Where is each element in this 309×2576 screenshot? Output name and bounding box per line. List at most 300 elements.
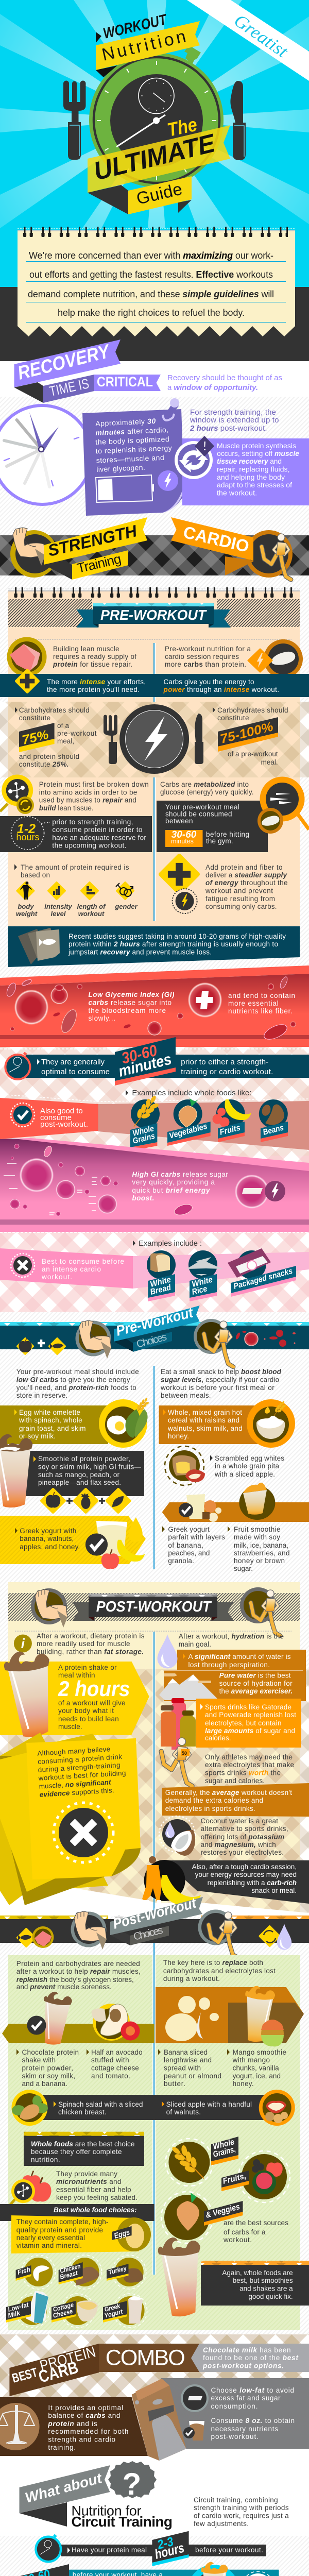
text columns: post-workout food options: lengthwise and xyxy=(164,2056,212,2064)
icon: gender: gender xyxy=(114,903,138,910)
recovery heading: CRITICAL xyxy=(97,374,153,389)
label: fish: Fish xyxy=(16,2266,31,2276)
band: average workout: electrolytes in sports drinks. xyxy=(165,1805,255,1812)
option: egg white omelette: grain toast, and skim xyxy=(19,1425,85,1432)
recovery heading xyxy=(14,340,161,403)
title ribbon: the ultimate guide: ULTIMATE xyxy=(91,128,218,186)
food circles: protein choices row one xyxy=(16,2255,146,2289)
label: chicken breast xyxy=(59,2262,83,2284)
box: 30-60 minutes before gym: 30-60 xyxy=(171,829,197,840)
heading: what about circuit training: Circuit Training xyxy=(71,2514,173,2530)
band: carb-rich snack after cardio: replenishing with a carb-rich xyxy=(208,1879,297,1887)
food: fruits circle: Fruits, xyxy=(222,2172,247,2186)
box: eggs: Eggs xyxy=(113,2228,131,2241)
text: circuit training intro: Circuit training, combining xyxy=(194,2496,278,2504)
box: whole foods: because they offer complete xyxy=(31,2148,122,2156)
block: protein broken down: Protein must first be broken down xyxy=(39,781,149,788)
strength text: 2 hours post-workout. xyxy=(190,424,267,433)
band: carb-rich snack after cardio xyxy=(142,1856,309,1906)
option: smoothie: such as mango, peach, or xyxy=(38,1471,119,1479)
band: protein meal 2-3 hours: 2-3 xyxy=(156,2534,175,2552)
text columns: post-workout food options: protein powder, xyxy=(22,2064,73,2072)
box: sports drinks: large amounts of sugar and xyxy=(205,1727,295,1735)
banner: best before intense cardio xyxy=(0,1248,133,1289)
box: whole foods xyxy=(24,2132,144,2166)
panel: best protein carb combo xyxy=(0,2334,309,2414)
title ribbon: the ultimate guide: The xyxy=(165,114,199,141)
food: whole grains: Whole xyxy=(132,1124,155,1138)
text: high GI carbs: very quickly, providing a xyxy=(132,1178,215,1186)
intro text: out efforts and getting the fastest results. Effective workouts xyxy=(29,269,273,280)
text: protein and carbs needed: replenish the body's glycogen stores, xyxy=(16,1976,134,1984)
panel: high GI examples xyxy=(0,1232,309,1312)
recovery intro text xyxy=(167,374,282,392)
icon: mini blood cells xyxy=(235,1330,296,1347)
block: add protein and fiber: deliver a steadier supply xyxy=(205,871,287,879)
panel: low-fat and 8 oz: excess fat and sugar xyxy=(211,2394,281,2402)
option: egg white omelette: Egg white omelette xyxy=(19,1409,80,1416)
icon: magenta blood cells xyxy=(4,1144,285,1217)
panel: optimal balance: strength and cardio xyxy=(48,2436,115,2444)
text: low GI carbs: slowly... xyxy=(89,1014,115,1022)
heading: what about circuit training: ? xyxy=(123,2467,141,2501)
box: whole foods: nutrition. xyxy=(31,2156,60,2164)
box: smoothies and shakes: Again, whole foods are xyxy=(222,2269,293,2277)
food: beans xyxy=(259,1099,288,1142)
panel: low-fat and 8 oz xyxy=(132,2378,309,2461)
option: hot cereal: honey. xyxy=(168,1432,189,1440)
option: scrambled egg whites: with a sliced apple. xyxy=(214,1470,275,1478)
text: high GI carbs: boost. xyxy=(132,1194,154,1202)
icon: runner with bib 50: 50 xyxy=(182,1751,187,1756)
icon: body weight: weight xyxy=(16,910,38,918)
panel: low GI bloodstream xyxy=(0,965,309,1047)
recovery intro text: Recovery should be thought of as xyxy=(167,374,282,382)
heading: cardio: CARDIO xyxy=(181,522,251,556)
text: protein and carbs needed xyxy=(16,1960,141,1991)
band: carb-rich snack after cardio: snack or meal. xyxy=(251,1887,297,1894)
intro text xyxy=(26,250,286,323)
block: add protein and fiber: Add protein and fiber to xyxy=(205,863,282,871)
panel: low-fat and 8 oz: consumption. xyxy=(211,2402,258,2410)
box: 1-2 hours prior: consume protein in order to xyxy=(52,826,142,834)
box: 1-2 hours prior: the upcoming workout. xyxy=(52,842,126,849)
band: intensity xyxy=(0,670,309,697)
callout: protein shake within 2 hours: of a workout will give xyxy=(58,1699,126,1707)
text: parfait and fruit smoothie: granola. xyxy=(168,1557,194,1565)
heading: what about circuit training xyxy=(20,2461,173,2530)
heading ribbon: post-workout: POST-WORKOUT xyxy=(96,1599,212,1615)
title ribbon: workout nutrition xyxy=(96,11,200,77)
callout: protein shake within 2 hours: muscle. xyxy=(58,1723,82,1731)
label: chicken breast: Chicken xyxy=(59,2262,81,2275)
text: pre-workout meal: Your pre-workout meal should include xyxy=(16,1368,139,1376)
band: pre-workout choices xyxy=(0,1320,309,1359)
Greatist corner ribbon xyxy=(187,0,309,81)
banner: also good post-workout: consume xyxy=(40,1113,72,1122)
band: 30-60 minutes low GI: minutes xyxy=(117,1050,174,1080)
yellow note: no significant evidence xyxy=(0,1733,141,1905)
strength text: window is extended up to xyxy=(190,416,279,425)
note: 30 minutes after cardio: to replenish its energy xyxy=(95,444,172,455)
text: low GI carbs: the bloodstream more xyxy=(89,1007,166,1014)
icon: runner circle xyxy=(194,1319,233,1367)
block: coconut water: offering lots of potassium xyxy=(201,1833,284,1841)
heading ribbon: pre-workout choices: Choices xyxy=(135,1331,168,1350)
title ribbon: the ultimate guide xyxy=(88,114,230,214)
callout: chocolate milk xyxy=(191,2344,309,2372)
block: carbs for cardio: cardio session requires xyxy=(165,653,239,660)
box: 30-60 minutes before gym xyxy=(157,801,268,852)
text: hydration: After a workout, hydration is the xyxy=(179,1633,284,1640)
callout: chocolate milk: post-workout options. xyxy=(202,2362,284,2370)
band: recent studies note: jumpstart recovery and prevent muscle loss. xyxy=(68,948,212,956)
text: pre-workout meal: you'll need, and protein-rich foods to xyxy=(16,1384,136,1392)
panel: hydration: the average exerciser. xyxy=(219,1687,293,1695)
panel: pre-workout paper xyxy=(8,587,300,926)
band: protein meal 2-3 hours: before your workout. xyxy=(195,2546,263,2554)
heading: strength training: Training xyxy=(76,551,123,576)
food: whole grains circle: Grains, xyxy=(212,2145,237,2159)
food: whole grains circle xyxy=(165,2137,238,2186)
text columns: post-workout food options: stuffed with xyxy=(91,2056,129,2064)
label: low-fat milk xyxy=(6,2301,31,2323)
panel: low GI gingham xyxy=(0,1047,309,1156)
heading ribbon: combo: COMBO xyxy=(106,2346,185,2370)
callout: 75% carbs: constitute xyxy=(19,714,50,722)
label: cottage cheese: Cottage xyxy=(52,2301,75,2313)
block: micronutrients: micronutrients and xyxy=(56,2178,121,2185)
yellow note: no significant evidence: muscle, no significant xyxy=(39,1778,111,1790)
food: veggies circle: workout. xyxy=(223,2236,252,2244)
intro notebook note xyxy=(18,231,295,336)
text: parfait and fruit smoothie: honey or brown xyxy=(234,1557,285,1565)
food: vegetables: Vegetables xyxy=(168,1122,209,1141)
panel: high GI bloodstream xyxy=(0,1138,309,1236)
band: spinach salad and sliced apple: chicken breast. xyxy=(58,2108,107,2116)
recovery heading: TIME IS xyxy=(48,376,91,399)
heading: strength training: STRENGTH xyxy=(46,521,139,560)
box: 1-2 hours prior: prior to strength training, xyxy=(52,818,133,826)
label: cottage cheese: Cheese xyxy=(52,2308,74,2319)
yellow note: no significant evidence: workout is best for building xyxy=(38,1769,126,1782)
box: sports drinks: electrolytes, but contain xyxy=(205,1719,281,1727)
callout: protein shake within 2 hours: 2 hours xyxy=(58,1676,130,1701)
food: whole grains: Grains xyxy=(132,1132,156,1146)
callout: chocolate milk: found to be one of the best xyxy=(203,2354,299,2362)
callout: 75-100% carbs: constitute xyxy=(217,714,249,722)
block: micronutrients xyxy=(4,2170,138,2212)
text: small snack: Eat a small snack to help boost blood xyxy=(161,1368,282,1376)
text columns: post-workout food options: peanut or almond xyxy=(164,2072,221,2080)
option: scrambled egg whites: Scrambled egg whites xyxy=(215,1454,284,1462)
block: protein for tissue repair: protein for tissue repair. xyxy=(53,660,132,668)
icon: runner with bib 50 xyxy=(161,1738,192,1786)
food: white bread xyxy=(147,1250,176,1301)
banner: also good post-workout: Also good to xyxy=(40,1107,83,1115)
note: 30 minutes after cardio: minutes after cardio, xyxy=(95,426,168,437)
callout: 75% carbs: pre-workout xyxy=(57,730,97,737)
text: small snack: sugar levels, especially if your cardio xyxy=(161,1376,279,1384)
Greatist corner ribbon: Greatist xyxy=(230,10,293,62)
icon: plate with lightning xyxy=(104,704,203,774)
icon: gender xyxy=(114,883,138,910)
banner: best before intense cardio: an intense cardio xyxy=(42,1265,101,1273)
block: protein depends on: based on xyxy=(21,871,50,879)
panel: low-fat and 8 oz: necessary nutrients xyxy=(211,2425,278,2433)
text: circuit training intro: of cardio work, requires just a xyxy=(194,2512,289,2520)
block: carbs metabolized: glucose (energy) very quickly. xyxy=(160,788,253,796)
panel: low-fat and 8 oz: Consume 8 oz. to obtain xyxy=(211,2417,295,2425)
callout: protein shake within 2 hours xyxy=(0,1649,149,1739)
box: sports drinks: and Powerade replenish lost xyxy=(205,1711,296,1719)
heading ribbon: pre-workout choices xyxy=(114,1304,200,1352)
band: recent studies note: Recent studies suggest taking in around 10-20 grams of high-quality xyxy=(68,933,286,940)
panel: hydration: A significant amount of water is xyxy=(188,1653,291,1660)
panel: hydration: Pure water is the best xyxy=(219,1672,291,1680)
block: add protein and fiber: workout and prevent xyxy=(205,887,273,895)
text columns: post-workout food options: and a banana. xyxy=(22,2080,67,2088)
note: 30 minutes after cardio: Approximately 30 xyxy=(95,417,156,428)
text: parfait and fruit smoothie: parfait with layers xyxy=(168,1533,225,1541)
icon: body weight: body xyxy=(18,903,34,910)
option: smoothie: soy or skim milk, high GI fruits— xyxy=(38,1463,141,1470)
icon: length of workout xyxy=(77,883,106,918)
label: low-fat milk: Low-fat xyxy=(7,2301,30,2313)
panel: high GI examples: Examples include : xyxy=(139,1239,202,1248)
block: protein broken down: build lean tissue. xyxy=(39,804,94,812)
text: only athletes: sports drinks worth the xyxy=(205,1769,281,1777)
food: whole grains circle: Whole xyxy=(212,2138,235,2151)
panel: carb and protein ratios xyxy=(0,702,309,777)
block: protein depends on: The amount of protein required is xyxy=(21,863,129,871)
box: whole foods: Whole foods are the best choice xyxy=(31,2140,134,2148)
intro text: We're more concerned than ever with maximizing our work- xyxy=(29,250,273,261)
option band: greek yogurt: Greek yogurt with xyxy=(20,1527,76,1535)
text: replace carbs and electrolytes: The key here is to replace both xyxy=(163,1959,263,1967)
band: 30-60 minutes low GI: 30-60 xyxy=(119,1041,159,1067)
band: protein meal 2-3 hours: hours xyxy=(153,2540,186,2562)
text: replace carbs and electrolytes: during a workout. xyxy=(163,1975,220,1982)
block: coconut water: Coconut water is a great xyxy=(201,1817,278,1825)
label: turkey xyxy=(107,2264,129,2281)
callout: 75% carbs: meal, xyxy=(57,737,74,745)
dotted divider and centre line xyxy=(15,639,291,921)
text columns: post-workout food options: and tomato. xyxy=(91,2072,130,2080)
text: parfait and fruit smoothie: of banana, xyxy=(168,1541,203,1549)
box: eggs: nearly every essential xyxy=(16,2234,85,2242)
icon: knife xyxy=(230,81,246,160)
notebook rings xyxy=(18,227,295,237)
icon: intensity level xyxy=(44,883,72,918)
band: average workout: demand the extra calories and xyxy=(165,1797,263,1804)
icon: arm circle xyxy=(75,1320,111,1359)
panel: hydration xyxy=(158,1634,306,1701)
note: 30 minutes after cardio: liver glycogen. xyxy=(96,463,145,473)
intro text: help make the right choices to refuel the body. xyxy=(58,308,245,318)
heading: what about circuit training: What about xyxy=(23,2470,105,2506)
note: 30 minutes after cardio: the body is optimized xyxy=(95,435,169,446)
strength text: For strength training, the xyxy=(190,408,276,417)
text columns: post-workout food options: shake with xyxy=(22,2056,56,2064)
callout: 75-100% carbs: of a pre-workout xyxy=(228,750,278,758)
panel: optimal balance: It provides an optimal xyxy=(48,2404,123,2412)
icon: intensity level: level xyxy=(51,910,66,918)
text: small snack xyxy=(160,1368,282,1399)
food: packaged snacks: Packaged snacks xyxy=(233,1267,294,1291)
text: pre-workout meal: low GI carbs to give you the energy xyxy=(16,1376,130,1384)
block: add protein and fiber: consuming only carbs. xyxy=(205,903,277,910)
label: cottage cheese xyxy=(52,2301,76,2323)
yellow note: no significant evidence: evidence supports this. xyxy=(39,1786,114,1799)
block: protein depends on xyxy=(14,863,129,918)
food: white rice: Rice xyxy=(191,1284,208,1297)
text columns: post-workout food options: butter. xyxy=(164,2080,185,2088)
panel: muscle protein synthesis xyxy=(175,437,309,505)
panel: hydration: source of hydration for xyxy=(219,1680,293,1687)
text: low GI carbs: carbs release sugar into xyxy=(89,999,171,1007)
icons: apple plus pineapple plus flax xyxy=(41,1489,130,1513)
option: egg white omelette: with spinach, whole xyxy=(19,1416,82,1424)
heading ribbon: pre-workout xyxy=(76,603,231,628)
text columns: post-workout food options: spread with xyxy=(164,2064,201,2072)
text: hydration xyxy=(179,1633,284,1648)
band: intensity: The more intense your efforts, xyxy=(47,678,146,686)
dotted divider and center line xyxy=(15,1631,291,2275)
block: micronutrients: essential fiber and help xyxy=(56,2186,131,2194)
panel: low-fat and 8 oz: Choose low-fat to avoid xyxy=(211,2386,294,2394)
icon: intensity level: intensity xyxy=(44,903,72,910)
block: carbs metabolized: Carbs are metabolized into xyxy=(160,781,249,788)
text: only athletes: extra electrolytes that make xyxy=(205,1761,294,1769)
option band: greek yogurt: banana, walnuts, xyxy=(20,1535,74,1543)
panel: muscle protein synthesis: occurs, setting off muscle xyxy=(217,449,299,457)
block: micronutrients: They provide many xyxy=(56,2170,117,2178)
text columns: post-workout food options: cottage cheese xyxy=(91,2064,139,2072)
box: eggs: quality protein and provide xyxy=(16,2226,103,2234)
heading: strength training xyxy=(10,517,147,580)
text: low GI carbs xyxy=(89,991,295,1022)
callout: chocolate milk: Chocolate milk has been xyxy=(203,2346,290,2354)
text: dietary protein xyxy=(14,1632,145,1656)
band: intensity: power through an intense workout. xyxy=(163,686,279,693)
option: scrambled egg whites xyxy=(165,1446,284,1485)
food: white bread: White xyxy=(149,1275,172,1289)
text: high GI carbs: quick but brief energy xyxy=(132,1187,211,1194)
text: parfait and fruit smoothie xyxy=(162,1526,289,1572)
option: smoothie xyxy=(0,1434,144,1513)
callout: 75% carbs: of a xyxy=(57,722,69,730)
band: recent studies note xyxy=(8,926,300,967)
banner: also good post-workout: Examples include whole foods like: xyxy=(132,1089,251,1097)
box: 30-60 minutes before gym: should be consumed xyxy=(165,810,232,818)
panel: muscle protein synthesis: and helping the body xyxy=(217,473,285,481)
label: greek yogurt xyxy=(103,2301,127,2323)
text columns: post-workout food options: Chocolate protein xyxy=(22,2048,79,2056)
text columns: post-workout food options: honey. xyxy=(233,2080,254,2088)
block: micronutrients: keep you feeling satiated. xyxy=(56,2194,138,2201)
callout: 75-100% carbs: 75-100% xyxy=(219,719,274,747)
dark band under intro xyxy=(0,287,309,361)
text: parfait and fruit smoothie: milk, ice, banana, xyxy=(234,1541,288,1549)
text columns: post-workout food options: Half an avocado xyxy=(91,2048,143,2056)
box: 1-2 hours prior: 1-2 xyxy=(17,822,36,836)
heading ribbon: combo: PROTEIN xyxy=(38,2344,97,2375)
food: fruits xyxy=(212,1099,251,1142)
box: sports drinks xyxy=(161,1698,301,1750)
band: average workout xyxy=(162,1783,309,1817)
text: low GI carbs: and tend to contain xyxy=(228,992,295,999)
box: eggs: vitamin and mineral. xyxy=(16,2242,82,2249)
band: carb-rich snack xyxy=(20,2562,279,2576)
title ribbon: workout nutrition: Nutrition xyxy=(100,26,188,65)
heading ribbon: post-workout choices: Post-Workout xyxy=(111,1894,199,1932)
text: circuit training intro: strength training with periods xyxy=(194,2504,289,2512)
band: 30-60 minutes low GI: optimal to consume xyxy=(41,1067,110,1076)
heading ribbon: pre-workout choices: Pre-Workout xyxy=(114,1304,195,1339)
option: scrambled egg whites: in a whole grain pita xyxy=(215,1462,279,1470)
panel: muscle protein synthesis: adapt to the stresses of xyxy=(217,481,292,489)
box: eggs: They contain complete, high- xyxy=(16,2218,108,2226)
box: smoothies and shakes xyxy=(157,2236,309,2317)
food: white bread: Bread xyxy=(149,1283,173,1297)
block: protein broken down: into amino acids in order to be xyxy=(39,788,137,796)
box: 1-2 hours prior: hours xyxy=(16,832,40,842)
text: parfait and fruit smoothie: made with soy xyxy=(234,1533,280,1541)
title ribbon: workout nutrition: WORKOUT xyxy=(101,11,169,42)
icon: length of workout: length of xyxy=(77,903,106,910)
box: 30-60 minutes before gym: before hitting xyxy=(206,831,249,838)
band: 30-60 minutes low GI: They are generally xyxy=(41,1058,105,1066)
box: sports drinks: calories. xyxy=(205,1734,231,1742)
text: pre-workout meal: store in reserve. xyxy=(16,1392,67,1399)
food: veggies circle xyxy=(161,2192,288,2244)
icon: fork xyxy=(63,80,85,160)
block: coconut water xyxy=(159,1816,288,1856)
option band: parfait and fruit smoothie xyxy=(162,1483,309,1522)
stopwatch xyxy=(89,45,224,188)
yellow note: no significant evidence: during a strength-training xyxy=(38,1761,121,1774)
text: dietary protein: After a workout, dietary protein is xyxy=(37,1632,145,1640)
yellow note: no significant evidence: consuming a protein drink xyxy=(38,1753,123,1766)
band: banana and mango smoothie xyxy=(156,1985,304,2046)
heading ribbon: combo: CARB xyxy=(37,2358,80,2386)
option: hot cereal: walnuts, skim milk, and xyxy=(167,1425,243,1432)
food: packaged snacks xyxy=(228,1248,296,1297)
text: protein and carbs needed: Protein and carbohydrates are needed xyxy=(16,1960,140,1968)
text columns: post-workout food options: Banana sliced xyxy=(164,2048,208,2056)
header: cyan sunburst background xyxy=(0,0,309,287)
box: smoothies and shakes: best, but smoothies xyxy=(233,2277,293,2284)
box: 30-60 minutes before gym: between xyxy=(165,817,193,825)
panel: optimal balance xyxy=(0,2397,148,2456)
panel: muscle protein synthesis: the workout. xyxy=(217,488,257,497)
band: post-workout choices xyxy=(0,1894,309,1958)
block: coconut water: restores your electrolytes. xyxy=(201,1849,284,1856)
block: protein for tissue repair: requires a ready supply of xyxy=(53,653,136,660)
text: high GI carbs: High GI carbs release sugar xyxy=(132,1171,228,1178)
text: replace carbs and electrolytes xyxy=(163,1959,276,1982)
text: small snack: between meals. xyxy=(161,1392,211,1399)
food circles: protein choices row two xyxy=(6,2291,147,2328)
box: 1-2 hours prior: have an adequate reserve for xyxy=(52,834,146,842)
heading: cardio xyxy=(171,517,293,580)
text: hydration: main goal. xyxy=(179,1640,211,1648)
box: sports drinks: Sports drinks like Gatorade xyxy=(205,1703,291,1711)
icon: length of workout: workout xyxy=(78,910,105,918)
band: carb-rich snack after cardio: your energy resources may need xyxy=(195,1871,297,1878)
text: high GI carbs xyxy=(132,1171,228,1202)
